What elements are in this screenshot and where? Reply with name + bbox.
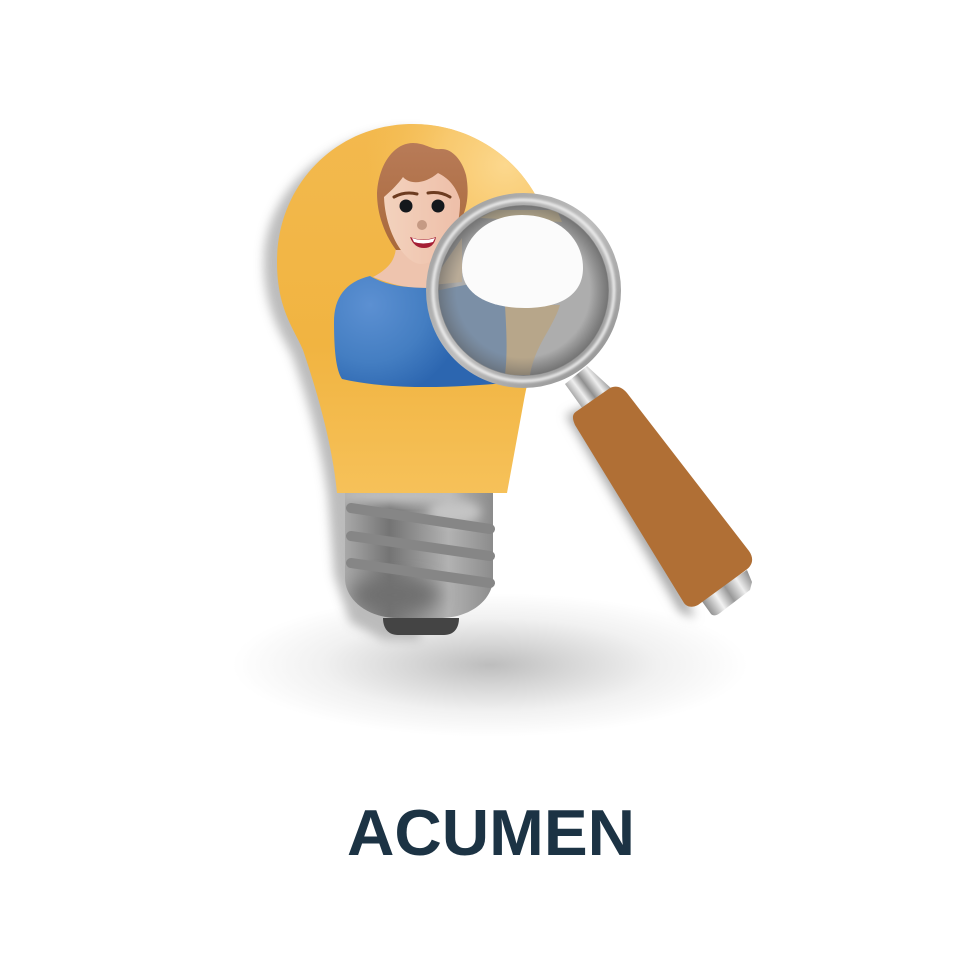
head <box>377 143 468 264</box>
title: ACUMEN <box>347 796 635 869</box>
wooden handle <box>573 387 752 607</box>
screw threads <box>351 508 490 583</box>
face <box>384 173 460 264</box>
light bulb <box>277 124 553 635</box>
shirt <box>334 276 505 387</box>
infographic: acumen icon <box>258 124 752 856</box>
bulb stem in lens <box>505 305 560 375</box>
eyebrows <box>394 192 450 197</box>
floor shadow <box>232 593 748 737</box>
lens inner shading <box>438 204 610 376</box>
bulb in lens top <box>480 210 562 222</box>
magnifying glass <box>430 199 752 618</box>
cast shadow behind bulb <box>264 130 420 640</box>
handle shadow <box>566 400 695 618</box>
skin in lens <box>438 238 462 284</box>
lens ring <box>432 199 615 382</box>
eyes <box>400 200 412 212</box>
nose <box>417 220 427 230</box>
neck <box>373 250 430 288</box>
lens glass <box>436 202 612 378</box>
hair back <box>377 143 468 250</box>
mouth <box>410 237 436 248</box>
white highlight <box>462 215 583 308</box>
metal neck <box>565 366 613 412</box>
glass bulb <box>277 124 553 493</box>
magnified content <box>430 204 610 376</box>
screw base <box>340 486 493 635</box>
person <box>334 143 505 387</box>
base contact <box>383 618 459 635</box>
shirt in lens <box>438 284 506 374</box>
metal end cap <box>701 570 752 615</box>
